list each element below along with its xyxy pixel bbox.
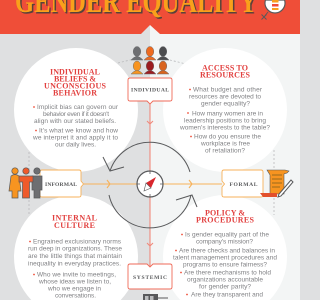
heading: individual beliefs: BEHAVIOR: [53, 88, 97, 98]
text: policy and procedures body: organizations accountable: [187, 276, 263, 284]
heading: individual beliefs: INDIVIDUAL: [50, 68, 100, 76]
text: policy and procedures body: for gender parity?: [199, 284, 251, 290]
horizontal connector: [82, 180, 222, 188]
text: policy and procedures body: Are there checks and balances in: [179, 248, 275, 254]
text: access to resources body: How many women are in: [192, 110, 263, 118]
heading: individual beliefs: BELIEFS &: [54, 74, 96, 84]
text: policy and procedures body: Are there mechanisms to hold: [184, 270, 271, 276]
label box: formal: [222, 170, 263, 197]
text: individual beliefs body: Implicit bias can govern our: [37, 104, 119, 111]
heading: internal culture: INTERNAL: [52, 214, 97, 222]
vertical connector: [147, 100, 153, 267]
text: individual beliefs body: our daily lives.: [55, 142, 96, 148]
heading: individual beliefs: [44, 68, 107, 98]
text: access to resources body: How do you ensure the: [194, 134, 261, 140]
label box: informal: INFORMAL: [45, 182, 77, 188]
text: access to resources body: [179, 86, 270, 154]
text: internal culture body: are the little things that maintain: [28, 253, 122, 260]
panel: internal culture: [14, 195, 138, 300]
text: policy and procedures body: [173, 232, 277, 298]
text: policy and procedures body: company's mission?: [196, 238, 253, 246]
label box: individual: INDIVIDUAL: [131, 88, 169, 94]
panel: policy and procedures: [163, 195, 287, 300]
icon: scroll and pen: [260, 170, 293, 197]
label box: formal: FORMAL: [230, 182, 258, 188]
heading: access to resources: [200, 64, 251, 80]
text: access to resources body: of retaliation?: [205, 148, 245, 154]
text: access to resources body: What budget and other: [193, 86, 263, 94]
heading: policy and procedures: PROCEDURES: [196, 216, 255, 224]
heading: policy and procedures: [196, 208, 255, 224]
text: access to resources body: workplace is free: [200, 140, 250, 148]
text: internal culture body: who we engage in: [47, 286, 101, 292]
label box: systemic: SYSTEMIC: [133, 275, 167, 281]
text: policy and procedures body: talent management procedures and: [173, 254, 277, 262]
icon: group of six heads: [131, 46, 169, 74]
heading: internal culture: CULTURE: [54, 221, 95, 230]
panel: individual beliefs: [14, 48, 138, 172]
heading: access to resources: RESOURCES: [200, 70, 251, 80]
heading: access to resources: ACCESS TO: [202, 64, 248, 72]
label box: informal: [40, 170, 84, 197]
text: internal culture body: Who we invite to meetings,: [37, 272, 116, 278]
icon: systemic building: [143, 294, 168, 300]
label box: systemic: [128, 264, 172, 289]
text: policy and procedures body: programs to ensure fairness?: [183, 262, 267, 268]
text: internal culture body: [28, 238, 122, 300]
text: individual beliefs body: behavior even if it doesn't: [43, 111, 109, 118]
text: internal culture body: conversations.: [55, 292, 96, 300]
text: individual beliefs body: [32, 104, 119, 148]
text: access to resources body: women's interests to the table?: [179, 124, 270, 132]
heading: internal culture: [52, 214, 97, 230]
icon: banner badge: [262, 0, 285, 20]
text: policy and procedures body: Is gender equality part of the: [185, 232, 269, 238]
text: access to resources body: gender equality?: [201, 100, 250, 108]
text: internal culture body: Engrained exclusionary norms: [33, 238, 122, 246]
text: individual beliefs body: we interpret it and apply it to: [32, 134, 118, 142]
heading: policy and procedures: POLICY &: [205, 208, 245, 218]
dotted connectors: [29, 59, 274, 215]
compass icon: [137, 171, 163, 197]
text: internal culture body: inequality in everyday practices.: [28, 260, 121, 268]
icon: three people: [9, 168, 42, 198]
text: individual beliefs body: It's what we know and how: [39, 128, 118, 134]
panel: access to resources: [163, 48, 287, 172]
text: access to resources body: leadership positions to bring: [184, 118, 266, 124]
text: internal culture body: whose ideas we listen to,: [38, 278, 111, 286]
banner: [0, 0, 300, 34]
text: individual beliefs body: align with our stated beliefs.: [34, 118, 116, 125]
label box: individual: [128, 78, 172, 104]
text: access to resources body: resources are devoted to: [189, 94, 261, 100]
cycle arrows: [103, 142, 197, 228]
heading: individual beliefs: UNCONSCIOUS: [44, 82, 107, 90]
text: internal culture body: run deep in organizations. These: [28, 246, 122, 252]
text: policy and procedures body: Are they transparent and: [191, 292, 263, 298]
